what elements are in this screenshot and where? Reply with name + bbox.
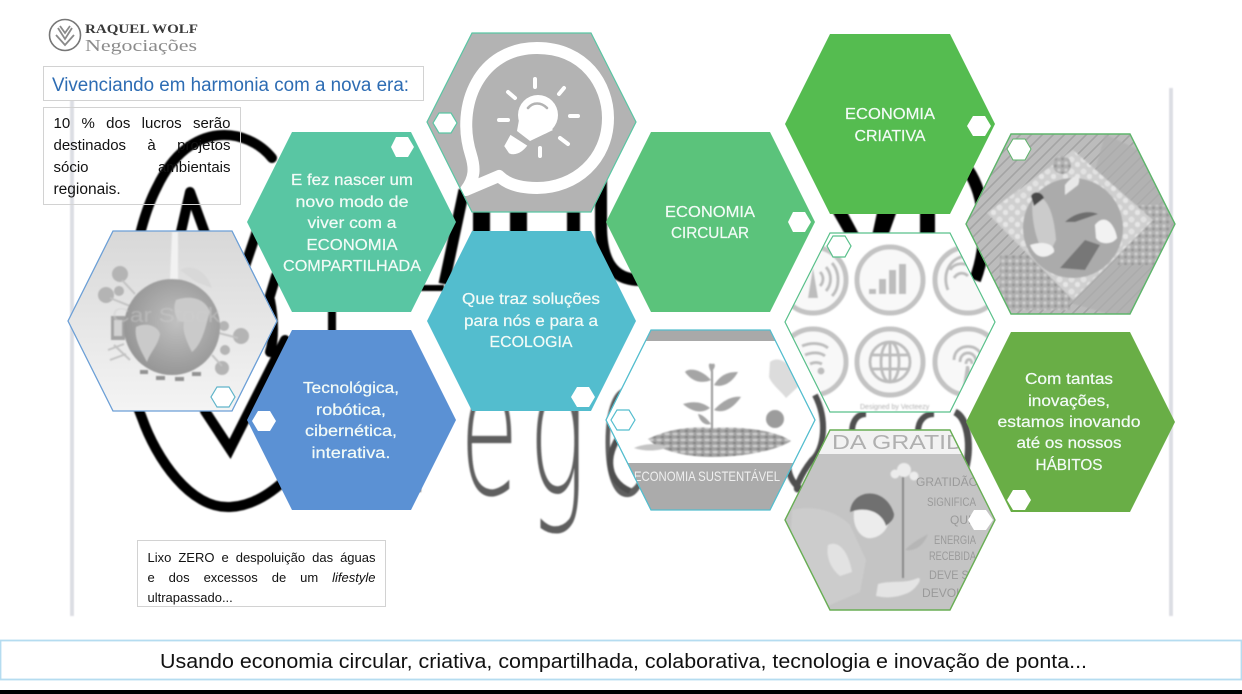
- marker: [391, 137, 414, 157]
- label: Com tantas: [1025, 371, 1113, 388]
- text box: 10% of profits: [43, 107, 241, 205]
- heading box: [43, 66, 424, 101]
- background side rule: right: [1169, 88, 1173, 616]
- watermark lower wordmark fragments: [418, 395, 968, 492]
- text box: zero waste: e dos excessos de um lifestyle: [148, 570, 376, 585]
- logo: Raquel Wolf Negociações: RAQUEL WOLF: [85, 21, 198, 36]
- background side rule: left: [70, 98, 74, 616]
- label: interativa.: [312, 445, 390, 462]
- label: COMPARTILHADA: [283, 258, 422, 275]
- hexagon: economia compartilhada: [247, 132, 456, 312]
- text box: 10% of profits: destinados à projetos: [54, 137, 230, 154]
- hexagon: ecologia: [427, 231, 636, 411]
- watermark upper wordmark fragments: [473, 205, 935, 236]
- bottom bar: [0, 640, 1242, 680]
- label: HÁBITOS: [1036, 457, 1102, 474]
- marker: [1007, 490, 1031, 510]
- marker: [967, 116, 991, 136]
- bottom black band: [0, 690, 1242, 694]
- gratitude illustration: DEVE SE: [929, 568, 976, 582]
- hexagon: habitos: [966, 332, 1175, 512]
- logo: Raquel Wolf Negociações: [50, 20, 198, 55]
- label: estamos inovando: [998, 414, 1140, 431]
- marker: [968, 510, 993, 530]
- gratitude illustration: SIGNIFICA: [927, 495, 976, 509]
- bubble and bulb icon: [466, 48, 608, 190]
- label: ECONOMIA: [665, 204, 756, 221]
- marker: [611, 410, 635, 430]
- label: [283, 172, 422, 275]
- text box: 10% of profits: 10 % dos lucros serão: [54, 115, 230, 132]
- label: ECONOMIA: [845, 106, 936, 123]
- hexagon: light bulb speech bubble: [427, 33, 636, 212]
- label: ECOLOGIA: [490, 334, 573, 351]
- label: ECONOMIA: [306, 237, 398, 254]
- mosaic picture of macaw and toucan: [987, 134, 1180, 320]
- hexagon: economia criativa: [785, 34, 995, 214]
- marker: [827, 236, 851, 257]
- text box: 10% of profits: sócio ambientais: [54, 159, 230, 176]
- gratitude illustration: [819, 430, 976, 598]
- watermark emblem oval and inner strokes: [126, 135, 332, 507]
- gratitude illustration: DA GRATID: [832, 432, 964, 454]
- marker: [433, 113, 457, 133]
- label: até os nossos: [1016, 435, 1122, 452]
- globe picture: [98, 232, 249, 381]
- logo emblem mark: [56, 26, 74, 45]
- label: [303, 380, 399, 462]
- bottom bar: Usando economia circular, criativa, compartilhada, colaborativa, tecnologia e inovação de ponta...: [160, 651, 1087, 673]
- hexagon: connectivity icons image: [780, 233, 1001, 412]
- label: [845, 106, 936, 145]
- text box: 10% of profits: regionais.: [54, 181, 121, 198]
- watermark lower wordmark: Nego: [360, 319, 656, 540]
- label: [462, 291, 600, 351]
- round technology icons: [780, 247, 1001, 411]
- label: [998, 371, 1140, 474]
- marker: [252, 411, 276, 431]
- hexagon: gratidao image: [785, 430, 995, 610]
- marker: [1007, 139, 1031, 160]
- label: robótica,: [316, 402, 386, 419]
- heading box: Vivenciando em harmonia com a nova era:: [52, 75, 409, 96]
- gratitude illustration: RECEBIDA: [929, 549, 976, 563]
- label: CIRCULAR: [671, 225, 749, 242]
- label: E fez nascer um: [291, 172, 413, 189]
- watermark: emblem and wordmark behind the hexagons: [126, 135, 984, 540]
- gratitude illustration: GRATIDÃO: [916, 475, 978, 489]
- hexagon: tecnologia: [247, 330, 456, 510]
- round technology icons: Designed by Vecteezy: [860, 404, 930, 411]
- marker: [211, 387, 235, 407]
- hexagon: tropical birds image: [966, 134, 1180, 320]
- label: Tecnológica,: [303, 380, 399, 397]
- text box: zero waste: Lixo ZERO e despoluição das águas: [148, 550, 376, 565]
- gratitude illustration: QUE: [950, 513, 976, 527]
- text box: zero waste: ultrapassado...: [148, 590, 233, 605]
- plant, coins and banner picture: ECONOMIA SUSTENTÁVEL: [634, 468, 780, 484]
- label: Que traz soluções: [462, 291, 600, 308]
- hexagon: globe image: [68, 231, 277, 411]
- label: inovações,: [1028, 393, 1110, 410]
- gratitude illustration: DEVOLV: [922, 586, 970, 600]
- logo: Raquel Wolf Negociações: Negociações: [85, 36, 197, 55]
- globe picture: Car Stock: [112, 305, 221, 327]
- label: [665, 204, 756, 242]
- watermark upper wordmark curves: [420, 170, 984, 288]
- gratitude illustration: ENERGIA: [934, 533, 976, 547]
- label: para nós e para a: [464, 313, 598, 330]
- marker: [571, 387, 595, 407]
- marker: [788, 212, 811, 232]
- label: novo modo de: [296, 194, 408, 211]
- hexagon: economia circular: [606, 132, 815, 312]
- label: cibernética,: [305, 423, 397, 440]
- plant, coins and banner picture: [628, 330, 798, 510]
- label: CRIATIVA: [854, 128, 926, 145]
- label: viver com a: [308, 215, 397, 232]
- text box: zero waste: [137, 540, 386, 607]
- hexagon: economia sustentavel image: [606, 330, 816, 511]
